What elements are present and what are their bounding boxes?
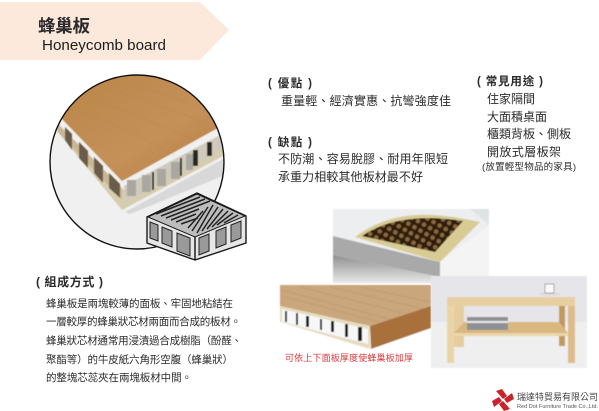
- disadvantages line 2: 承重力相較其他板材最不好: [278, 169, 423, 184]
- uses list: 住家隔間: [487, 91, 535, 106]
- composition block: [36, 274, 242, 384]
- uses list: [487, 91, 571, 159]
- uses list: 大面積桌面: [487, 109, 547, 124]
- uses note: (放置輕型物品的家具): [482, 161, 576, 173]
- logo mark: [492, 389, 514, 411]
- company name: 瑞達特貿易有限公司: [517, 391, 598, 402]
- disadvantages line 1: 不防潮、容易脫膠、耐用年限短: [278, 151, 448, 166]
- advantages text: 重量輕、經濟實惠、抗彎強度佳: [281, 93, 451, 108]
- company English name: Red Dot Furniture Trade Co.,Ltd.: [517, 404, 598, 410]
- common uses block: [477, 74, 576, 173]
- advantages block: [268, 76, 451, 108]
- advantages heading: ( 優點 ): [268, 76, 312, 90]
- composition paragraph: 的整塊芯蕊夾在兩塊板材中間。: [46, 371, 192, 384]
- title: Chinese: 蜂巢板: [38, 16, 90, 36]
- uses list: 開放式層板架: [487, 144, 561, 159]
- composition paragraph: [46, 297, 242, 384]
- circular honeycomb board illustration: [50, 70, 225, 249]
- photo: chipboard honeycomb corner: [333, 209, 489, 283]
- composition paragraph: 蜂巢狀芯材通常用浸漬過合成樹脂（酚醛、: [46, 334, 242, 347]
- composition heading: ( 組成方式 ): [36, 274, 103, 289]
- photo: coffee table: [431, 276, 587, 368]
- icon: honeycomb cutaway cube: [147, 193, 246, 260]
- composition paragraph: 蜂巢板是兩塊較薄的面板、牢固地粘結在: [46, 297, 233, 310]
- company logo: [492, 389, 598, 411]
- uses heading: ( 常見用途 ): [477, 74, 543, 88]
- title banner: [0, 2, 229, 60]
- disadvantages block: [268, 135, 448, 184]
- caption: thickness note: 可依上下面板厚度使蜂巢板加厚: [285, 352, 413, 363]
- composition paragraph: 一層較厚的蜂巢狀芯材兩面而合成的板材。: [46, 315, 241, 328]
- uses list: 櫃類背板、側板: [487, 127, 571, 141]
- title: English: Honeycomb board: [42, 37, 166, 54]
- composition paragraph: 聚酯等）的牛皮紙六角形空腹（蜂巢狀）: [46, 353, 233, 366]
- photo: thick wood honeycomb panel: [280, 285, 431, 350]
- disadvantages heading: ( 缺點 ): [268, 135, 312, 149]
